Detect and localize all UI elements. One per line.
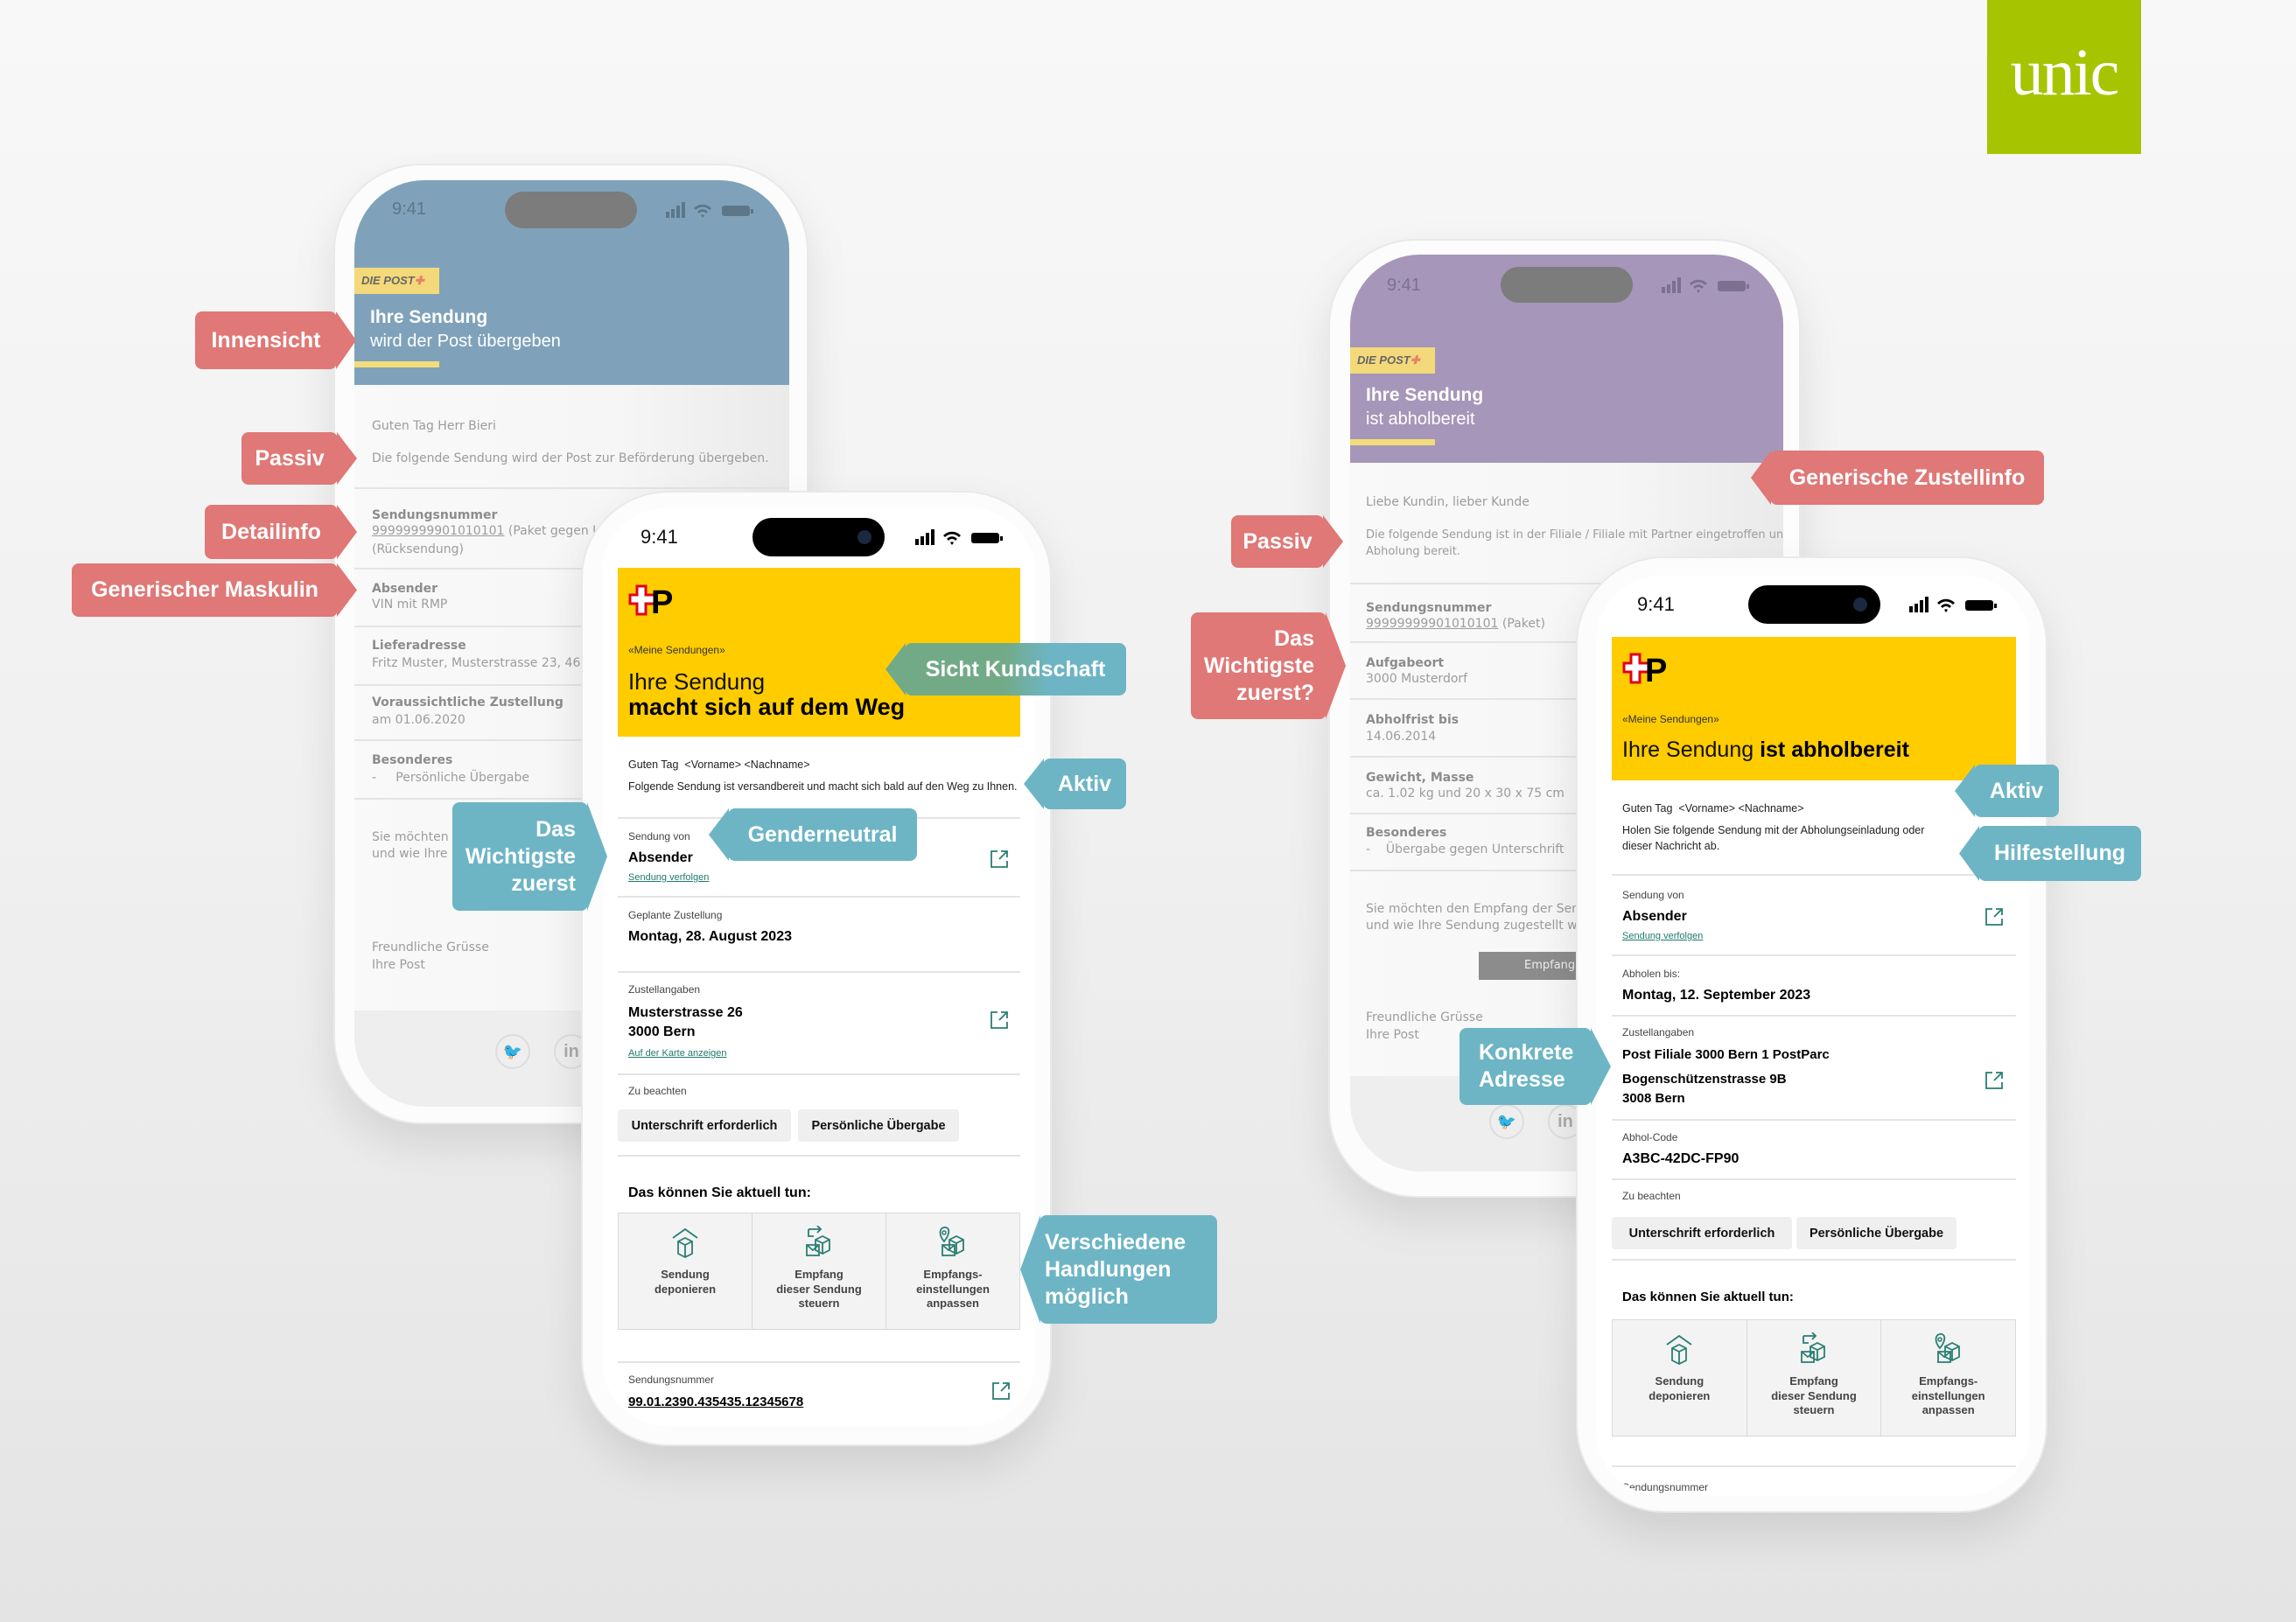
content rows: Sendungsnummer bbox=[1622, 1481, 1708, 1493]
label: Innensicht bbox=[195, 311, 337, 369]
label: Verschiedene Handlungen möglich: Handlungen bbox=[1045, 1256, 1171, 1281]
body text: old: und wie Ihre Sendung zugestellt wird. bbox=[1366, 919, 1597, 933]
label: Generischer Maskulin: Generischer Maskulin bbox=[91, 577, 318, 602]
header: blue: 9:41 bbox=[392, 199, 426, 219]
screen: new bbox=[1596, 576, 2030, 1496]
body text: old: 99999999901010101 (Paket gegen Unterschrift) bbox=[372, 524, 669, 538]
label: Das Wichtigste zuerst: Das bbox=[536, 817, 576, 842]
body text: old: Sendungsnummer bbox=[1366, 601, 1491, 615]
action grid: anpassen bbox=[927, 1297, 979, 1310]
content rows: Sendung von bbox=[628, 830, 690, 842]
phone: right front (new version) bbox=[1576, 556, 2048, 1513]
content rows: Abholen bis: bbox=[1622, 968, 1680, 980]
content rows: Folgende Sendung ist versandbereit und macht sich bald auf den Weg zu Ihnen. bbox=[628, 780, 1018, 793]
content rows: Guten Tag <Vorname> <Nachname> bbox=[1622, 801, 1804, 814]
body text: old: und wie Ihre Sendung zugestellt wird. bbox=[372, 847, 603, 861]
content rows: Zustellangaben bbox=[628, 983, 700, 996]
body text: old: Guten Tag Herr Bieri bbox=[372, 419, 496, 433]
body text: old: Liebe Kundin, lieber Kunde bbox=[1366, 495, 1530, 509]
screen: old mail blue bbox=[354, 180, 789, 1107]
header: purple: Ihre Sendung bbox=[1366, 385, 1483, 405]
body text: old: Empfang steuern bbox=[1524, 959, 1622, 972]
label: Sicht Kundschaft: Sicht Kundschaft bbox=[926, 656, 1105, 681]
label: Das Wichtigste zuerst?: zuerst? bbox=[1236, 681, 1314, 705]
icon: post logo bbox=[1622, 653, 1667, 685]
action grid bbox=[1612, 1319, 2016, 1437]
label: Das Wichtigste zuerst?: Wichtigste bbox=[1204, 653, 1314, 677]
label: Aktiv (right group) bbox=[1974, 765, 2059, 817]
content rows: Absender bbox=[1622, 909, 1687, 924]
phone: right back (old version) bbox=[1328, 239, 1801, 1198]
body text: old: Absender bbox=[372, 582, 438, 596]
footer: social icons bbox=[1350, 1076, 1783, 1171]
body text: old bbox=[1350, 495, 1783, 1042]
content rows: Sendungsnummer bbox=[628, 1374, 714, 1386]
body text: old: 14.06.2014 bbox=[1366, 730, 1436, 744]
body text: old bbox=[354, 419, 769, 972]
action grid: steuern bbox=[1794, 1403, 1834, 1416]
label: Innensicht: Innensicht bbox=[211, 327, 320, 352]
body text: old: - Übergabe gegen Unterschrift bbox=[1366, 842, 1564, 856]
content rows: 3008 Bern bbox=[1622, 1091, 1685, 1106]
content rows: 3000 Bern bbox=[628, 1024, 695, 1039]
label: Passiv (left) bbox=[242, 432, 338, 485]
body text: old: VIN mit RMP bbox=[372, 598, 447, 612]
content rows: dieser Nachricht ab. bbox=[1622, 840, 1719, 852]
logo: unic: unic bbox=[2011, 35, 2118, 108]
label: Detailinfo bbox=[205, 505, 338, 559]
body text: old: Sie möchten den Empfang der Sendung bbox=[1366, 902, 1611, 916]
label: Aktiv (left group): Aktiv bbox=[1058, 772, 1111, 796]
content rows: Guten Tag <Vorname> <Nachname> bbox=[628, 759, 810, 771]
body text: old: Fritz Muster, Musterstrasse 23, 4600 Muster bbox=[372, 656, 642, 670]
content rows: Persönliche Übergabe bbox=[811, 1118, 946, 1132]
body text: old: Freundliche Grüsse bbox=[372, 940, 489, 954]
label: Passiv (right) bbox=[1231, 515, 1324, 568]
action grid: deponieren bbox=[654, 1283, 716, 1295]
badge: DIE POST: DIE POST✚ bbox=[1357, 353, 1420, 367]
label: Generische Zustellinfo bbox=[1770, 451, 2044, 505]
footer: social icons bbox=[354, 1010, 789, 1107]
header: yellow: «Meine Sendungen» bbox=[628, 644, 725, 656]
action grid: einstellungen bbox=[1912, 1389, 1985, 1402]
content rows: Absender bbox=[628, 850, 693, 865]
body text: old: Lieferadresse bbox=[372, 639, 466, 653]
body text: old: am 01.06.2020 bbox=[372, 713, 466, 727]
phone: left front (new version) bbox=[581, 491, 1052, 1446]
action grid bbox=[618, 1213, 1020, 1330]
status bar: 9:41 bbox=[1637, 593, 1675, 615]
content rows: Holen Sie folgende Sendung mit der Abholungseinladung oder bbox=[1622, 824, 1924, 836]
content rows: 99.01.2390.435435.12345678 bbox=[628, 1395, 803, 1409]
action grid: steuern bbox=[799, 1297, 839, 1310]
content rows: Musterstrasse 26 bbox=[628, 1005, 743, 1020]
footer: social icons: 🐦 bbox=[1497, 1113, 1516, 1130]
label: Verschiedene Handlungen möglich: Verschiedene bbox=[1045, 1230, 1186, 1255]
screen: old mail purple bbox=[1350, 255, 1783, 1171]
action grid: Empfang bbox=[794, 1268, 844, 1281]
content rows: Das können Sie aktuell tun: bbox=[1622, 1290, 1794, 1304]
action grid: dieser Sendung bbox=[776, 1283, 862, 1295]
chips bbox=[1612, 1217, 1792, 1249]
content rows: Das können Sie aktuell tun: bbox=[628, 1185, 811, 1200]
body text: old: Abholfrist bis bbox=[1366, 713, 1459, 727]
label: Verschiedene Handlungen möglich bbox=[1040, 1215, 1217, 1324]
header: purple bbox=[1350, 255, 1783, 463]
content rows: Bogenschützenstrasse 9B bbox=[1622, 1072, 1787, 1087]
body text: old: 99999999901010101 (Paket) bbox=[1366, 617, 1545, 631]
chips: Unterschrift erforderlich bbox=[1629, 1227, 1774, 1241]
content rows bbox=[618, 759, 1020, 1409]
action grid: dieser Sendung bbox=[1771, 1389, 1857, 1402]
label: Aktiv (right group): Aktiv bbox=[1990, 779, 2043, 803]
body text: old: Ihre Post bbox=[372, 958, 425, 972]
label: Passiv (left): Passiv bbox=[255, 446, 325, 471]
header: yellow: macht sich auf dem Weg bbox=[628, 694, 905, 720]
header: blue bbox=[354, 180, 789, 385]
body text: old: Die folgende Sendung wird der Post zur Beförderung übergeben. bbox=[372, 451, 769, 465]
body text: old: Sendungsnummer bbox=[372, 508, 497, 522]
body text: old: Besonderes bbox=[1366, 826, 1446, 840]
content rows: Sendung verfolgen bbox=[1622, 931, 1703, 941]
content rows: Post Filiale 3000 Bern 1 PostParc bbox=[1622, 1047, 1830, 1062]
header: yellow: «Meine Sendungen» bbox=[1622, 713, 1719, 725]
label: Verschiedene Handlungen möglich: möglich bbox=[1045, 1284, 1129, 1309]
content rows: Geplante Zustellung bbox=[628, 909, 722, 921]
header: purple: ist abholbereit bbox=[1366, 409, 1475, 429]
action grid: Empfangs- bbox=[923, 1268, 983, 1281]
footer: social icons: in bbox=[1558, 1112, 1573, 1131]
content rows bbox=[1612, 801, 2016, 1493]
chips: Unterschrift erforderlich bbox=[632, 1118, 777, 1132]
body text: old: ca. 1.02 kg und 20 x 30 x 75 cm bbox=[1366, 787, 1564, 801]
chips bbox=[618, 1109, 791, 1142]
header: purple: 9:41 bbox=[1387, 276, 1421, 295]
content rows: A3BC-42DC-FP90 bbox=[1622, 1151, 1739, 1166]
badge: DIE POST: DIE POST✚ bbox=[361, 274, 424, 287]
status bar bbox=[1637, 585, 1997, 624]
body text: old: Sie möchten den Empfang der Sendung bbox=[372, 830, 617, 844]
header: yellow: Ihre Sendung ist abholbereit bbox=[1622, 738, 1909, 762]
label: Das Wichtigste zuerst bbox=[452, 802, 588, 911]
badge: DIE POST bbox=[1350, 347, 1435, 374]
body text: old: Besonderes bbox=[372, 753, 452, 767]
content rows: Zu beachten bbox=[628, 1085, 687, 1097]
content rows: Sendung von bbox=[1622, 889, 1684, 901]
label: Genderneutral: Genderneutral bbox=[748, 822, 897, 847]
label: Hilfestellung: Hilfestellung bbox=[1994, 841, 2125, 865]
content rows: Zu beachten bbox=[1622, 1190, 1681, 1202]
body text: old: Ihre Post bbox=[1366, 1028, 1419, 1042]
label: Genderneutral bbox=[728, 808, 917, 861]
action grid: Empfangs- bbox=[1919, 1374, 1978, 1388]
content rows: Montag, 12. September 2023 bbox=[1622, 988, 1810, 1003]
header: yellow: Ihre Sendung bbox=[628, 668, 765, 695]
label: Passiv (right): Passiv bbox=[1242, 528, 1312, 553]
label: Konkrete Adresse bbox=[1460, 1028, 1592, 1105]
badge: DIE POST bbox=[354, 268, 439, 294]
action grid: Sendung bbox=[1656, 1374, 1704, 1388]
label: Aktiv (left group) bbox=[1043, 759, 1126, 809]
content rows: Abhol-Code bbox=[1622, 1131, 1677, 1143]
body text: old: Voraussichtliche Zustellung bbox=[372, 696, 564, 710]
content rows: Zustellangaben bbox=[1622, 1026, 1694, 1038]
body text: old: 3000 Musterdorf bbox=[1366, 672, 1467, 686]
header: blue: wird der Post übergeben bbox=[370, 332, 561, 351]
body text: old: Abholung bereit. bbox=[1366, 545, 1460, 558]
action grid: anpassen bbox=[1922, 1403, 1975, 1416]
status bar: 9:41 bbox=[640, 526, 678, 548]
header: yellow bbox=[618, 568, 1020, 737]
label: Das Wichtigste zuerst: Wichtigste bbox=[466, 843, 576, 868]
screen: new bbox=[602, 507, 1035, 1426]
label: Das Wichtigste zuerst: zuerst bbox=[511, 871, 576, 896]
body text: old: (Rücksendung) bbox=[372, 542, 464, 556]
content rows: Persönliche Übergabe bbox=[1810, 1227, 1943, 1241]
body text: old: - Persönliche Übergabe bbox=[372, 771, 529, 785]
action grid: einstellungen bbox=[916, 1283, 990, 1295]
label: Generische Zustellinfo: Generische Zustellinfo bbox=[1789, 465, 2025, 490]
footer: social icons: 🐦 bbox=[503, 1043, 522, 1060]
body text: old: Gewicht, Masse bbox=[1366, 771, 1474, 785]
action grid: Empfang bbox=[1789, 1374, 1838, 1388]
body text: old: Aufgabeort bbox=[1366, 656, 1444, 670]
content rows: Auf der Karte anzeigen bbox=[628, 1048, 727, 1059]
content rows: Sendung verfolgen bbox=[628, 872, 709, 883]
icon: post logo bbox=[628, 584, 673, 616]
label: Hilfestellung bbox=[1978, 826, 2141, 881]
label: Das Wichtigste zuerst?: Das bbox=[1274, 626, 1314, 651]
label: Detailinfo: Detailinfo bbox=[221, 520, 321, 544]
header: yellow bbox=[1612, 637, 2016, 780]
status bar bbox=[640, 518, 1003, 556]
label: Konkrete Adresse: Konkrete bbox=[1479, 1040, 1573, 1065]
phone: left back (old version) bbox=[333, 164, 808, 1124]
label: Sicht Kundschaft bbox=[905, 643, 1126, 696]
header: blue: Ihre Sendung bbox=[370, 307, 487, 327]
action grid: deponieren bbox=[1648, 1389, 1710, 1402]
label: Generischer Maskulin bbox=[72, 563, 338, 617]
label: Das Wichtigste zuerst? bbox=[1191, 612, 1326, 719]
footer: social icons: in bbox=[564, 1042, 579, 1061]
body text: old: Freundliche Grüsse bbox=[1366, 1010, 1483, 1024]
content rows: Montag, 28. August 2023 bbox=[628, 929, 792, 944]
label: Konkrete Adresse: Adresse bbox=[1479, 1067, 1565, 1092]
action grid: Sendung bbox=[661, 1268, 710, 1281]
logo: unic bbox=[1987, 0, 2141, 154]
